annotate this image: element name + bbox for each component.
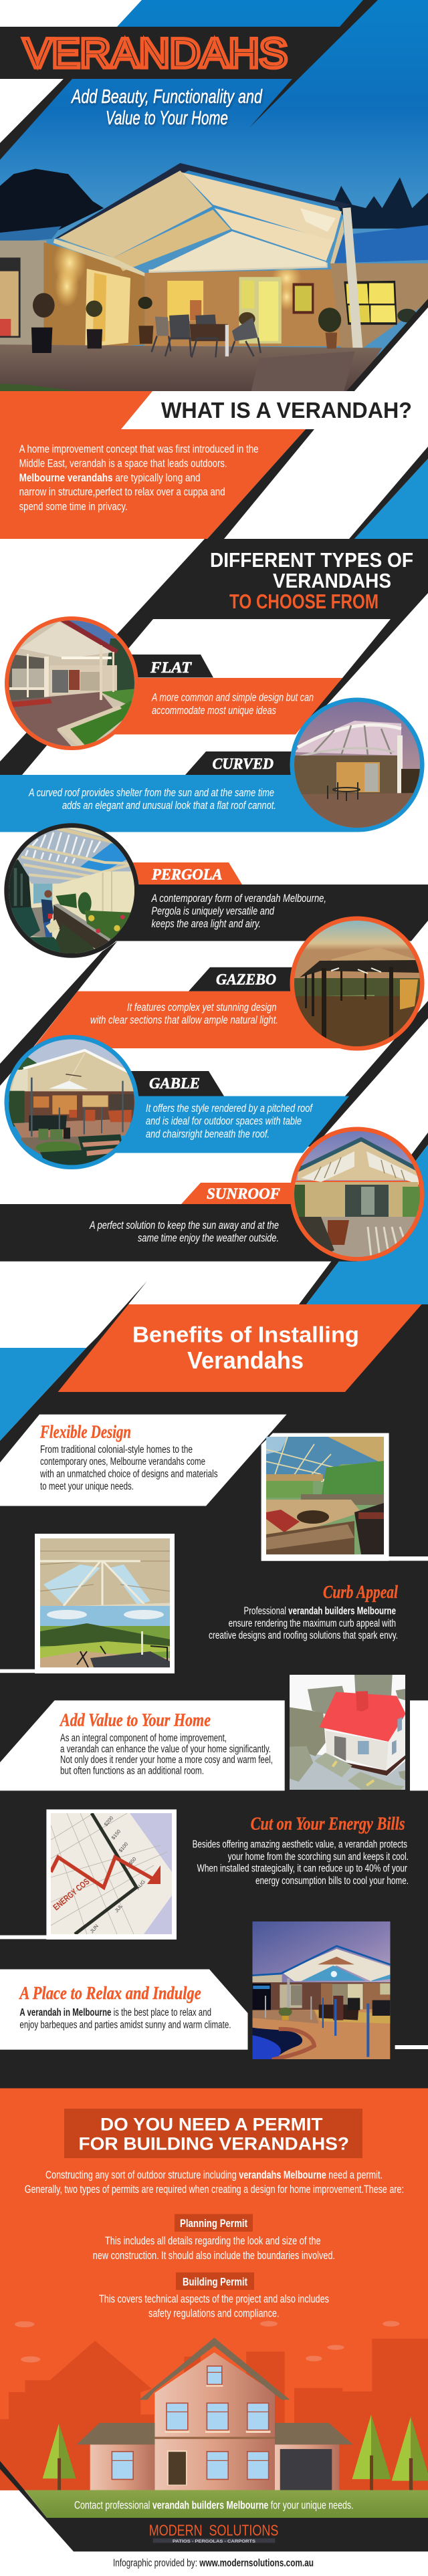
flat description band <box>100 678 342 734</box>
flat photo circle <box>0 616 144 750</box>
white connector line <box>0 1936 48 1939</box>
flat label: FLAT <box>150 659 192 676</box>
heading: different types: DIFFERENT TYPES OF <box>210 548 413 572</box>
photo: glass roof patio <box>266 1437 385 1554</box>
curved description band <box>0 775 354 832</box>
gazebo label tab <box>189 967 294 991</box>
intro text: Constructing any sort of outdoor structure including verandahs Melbourne need a permit. <box>45 2168 383 2181</box>
footer <box>0 2461 428 2569</box>
blue lower right panel stripe <box>299 1133 428 1304</box>
body <box>39 1444 218 1492</box>
body: but often functions as an additional room. <box>60 1766 204 1777</box>
type: pergola <box>4 823 428 958</box>
intro text <box>25 2168 404 2196</box>
heading: A Place to Relax and Indulge <box>19 1983 201 2003</box>
hero right corner stripe <box>346 299 428 391</box>
photo: roof with skylights and view <box>40 1538 170 1667</box>
chart photo: energy cost: $50 <box>128 1856 138 1866</box>
subtitle <box>71 86 263 129</box>
left white corner <box>0 79 64 143</box>
heading: Flexible Design <box>39 1421 131 1441</box>
chart photo: energy cost <box>51 1813 172 1934</box>
text panel <box>0 1970 247 2050</box>
gable label tab <box>130 1071 224 1096</box>
white connector line <box>0 1669 36 1673</box>
flat description: A more common and simple design but can <box>151 691 314 704</box>
planning permit text <box>93 2234 335 2262</box>
gazebo label: GAZEBO <box>216 971 276 988</box>
sunroof description: same time enjoy the weather outside. <box>138 1232 279 1244</box>
white connector line <box>389 1556 428 1560</box>
type: gable <box>4 1035 349 1169</box>
photo frame <box>261 1433 389 1561</box>
sunroof photo circle <box>290 1127 424 1264</box>
heading banner <box>58 1304 421 1392</box>
white background on the right <box>121 308 428 539</box>
gable description: and chairsright beneath the roof. <box>146 1127 270 1141</box>
body <box>60 1733 273 1777</box>
building permit label: Building Permit <box>183 2276 247 2289</box>
title band <box>0 0 378 128</box>
logo: MODERN SOLUTIONS <box>149 2522 278 2539</box>
photo: verandah at night <box>252 1921 391 2060</box>
subtitle: Add Beauty, Functionality and <box>71 86 263 108</box>
gable label: GABLE <box>149 1075 200 1092</box>
chart photo: energy cost: $100 <box>118 1841 129 1853</box>
gazebo description band <box>33 991 357 1048</box>
sunroof label tab <box>181 1183 294 1204</box>
heading text: DO YOU NEED A PERMIT <box>100 2115 323 2135</box>
paragraph: spend some time in privacy. <box>19 500 128 513</box>
sunroof label: SUNROOF <box>207 1185 280 1202</box>
section: types of verandahs backdrop band <box>0 539 428 775</box>
body: A verandah in Melbourne is the best place to relax and <box>19 2007 211 2018</box>
flat description <box>151 691 314 717</box>
flat label tab <box>130 655 213 678</box>
gazebo description <box>90 1001 278 1026</box>
subtitle: Value to Your Home <box>106 108 228 129</box>
sunroof description: A perfect solution to keep the sun away and at the <box>89 1219 279 1232</box>
curved description: adds an elegant and unusual look that a flat roof cannot. <box>62 799 276 812</box>
orange panel stripe <box>207 429 314 539</box>
building permit text <box>99 2293 329 2320</box>
title: VERANDAHS <box>23 31 288 76</box>
body: Professional verandah builders Melbourne <box>243 1605 396 1617</box>
pergola description: keeps the area light and airy. <box>151 917 261 930</box>
section: what is a verandah <box>0 308 428 539</box>
white connector line <box>395 2045 428 2049</box>
heading: WHAT IS A VERANDAH? <box>161 398 412 423</box>
logo: PATIOS - PERGOLAS - CARPORTS <box>173 2539 256 2544</box>
body: contemporary ones, Melbourne verandahs come <box>40 1456 205 1468</box>
orange background <box>0 2089 428 2490</box>
benefits: dark backdrop <box>0 1281 428 2089</box>
pergola label: PERGOLA <box>151 866 223 883</box>
heading text <box>79 2115 349 2153</box>
heading text <box>132 1322 359 1374</box>
benefit: flexible design <box>0 1415 428 1561</box>
chart photo: energy cost: $200 <box>103 1815 114 1827</box>
body: with an unmatched choice of designs and materials <box>39 1469 218 1480</box>
benefits heading <box>58 1304 421 1392</box>
chart photo: energy cost: AUG <box>135 1879 146 1891</box>
blue lower left panel <box>0 1348 86 1441</box>
logo <box>149 2522 278 2544</box>
gable description <box>146 1102 314 1141</box>
illustration: house and trees <box>43 2338 428 2492</box>
pergola description band <box>72 885 428 941</box>
heading: different types: TO CHOOSE FROM <box>229 590 379 613</box>
curved label: CURVED <box>213 755 274 772</box>
gable description band <box>72 1096 349 1153</box>
flat description: accommodate most unique ideas <box>152 704 276 717</box>
hero photo: verandah at dusk <box>0 0 428 391</box>
heading box <box>64 2109 362 2158</box>
benefit: curb appeal <box>0 1534 398 1673</box>
building permit label <box>176 2272 254 2290</box>
benefit: relax and indulge <box>0 1921 428 2060</box>
paragraph: Middle East, verandah is a space that leads outdoors. <box>19 457 227 469</box>
curved photo circle <box>290 698 424 832</box>
body <box>193 1839 409 1887</box>
curved description <box>28 786 276 812</box>
body: Not only does it render your home a more cosy and warm feel, <box>60 1754 273 1766</box>
paragraph: narrow in structure,perfect to relax over a cuppa and <box>19 485 225 498</box>
left diagonal stripe <box>0 941 118 1086</box>
type: flat <box>0 616 342 750</box>
heading: Curb Appeal <box>323 1582 398 1602</box>
paragraph <box>19 443 259 513</box>
gable description: It offers the style rendered by a pitched roof <box>146 1102 314 1115</box>
blue lower right panel <box>306 1145 428 1304</box>
green lawn band <box>25 2490 428 2518</box>
heading text: Verandahs <box>187 1346 304 1374</box>
left dark accent stripe <box>0 79 72 160</box>
photo: house and money <box>289 1673 406 1790</box>
planning permit label <box>175 2214 253 2232</box>
heading text: FOR BUILDING VERANDAHS? <box>79 2133 349 2153</box>
gazebo photo circle <box>290 916 424 1056</box>
type: gazebo <box>33 916 424 1056</box>
gazebo description: It features complex yet stunning design <box>127 1001 277 1014</box>
pergola photo circle <box>4 823 139 958</box>
blue corner stripe <box>349 447 428 539</box>
pergola description: Pergola is uniquely versatile and <box>151 905 274 917</box>
paragraph: Melbourne verandahs are typically long and <box>19 471 201 484</box>
benefit: add value <box>0 1673 428 1790</box>
benefit: energy bills <box>0 1809 409 1940</box>
body <box>19 2007 231 2031</box>
pergola description: A contemporary form of verandah Melbourne, <box>151 892 326 905</box>
pergola description <box>151 892 326 930</box>
heading: Add Value to Your Home <box>59 1710 211 1730</box>
chart photo: energy cost: $150 <box>110 1829 122 1841</box>
body: As an integral component of home improvement, <box>60 1733 227 1744</box>
heading: different types: VERANDAHS <box>273 569 391 592</box>
body <box>209 1605 398 1641</box>
building permit text: This covers technical aspects of the project and also includes <box>99 2293 329 2305</box>
body: From traditional colonial-style homes to the <box>40 1444 193 1455</box>
body: enjoy barbeques and parties amidst sunny and warm climate. <box>19 2019 231 2031</box>
contact line: Contact professional verandah builders Melbourne for your unique needs. <box>74 2499 354 2512</box>
cityscape <box>0 2321 428 2491</box>
text panel <box>0 1700 285 1790</box>
type: sunroof <box>0 1127 424 1264</box>
gable photo circle <box>4 1035 139 1169</box>
photo frame <box>35 1534 175 1673</box>
gazebo description: with clear sections that allow ample natural light. <box>90 1014 278 1026</box>
curved label tab <box>185 751 294 775</box>
white side block <box>410 1700 428 1790</box>
orange panel <box>0 391 306 539</box>
chart photo: energy cost: JUL <box>114 1903 124 1913</box>
sunroof description <box>89 1219 279 1244</box>
title: VERANDAHS <box>23 31 288 76</box>
right diagonal stripe <box>301 1001 428 1147</box>
body: a verandah can enhance the value of your home significantly. <box>60 1744 271 1755</box>
pergola label tab <box>130 862 242 885</box>
building permit text: safety regulations and compliance. <box>148 2307 280 2320</box>
top white corner <box>0 0 142 27</box>
dark base <box>0 2461 428 2551</box>
heading text: Benefits of Installing <box>132 1322 359 1346</box>
chart photo: energy cost: ENERGY COST <box>51 1873 94 1912</box>
curved description: A curved roof provides shelter from the sun and at the same time <box>28 786 274 799</box>
sunroof description band <box>0 1204 357 1262</box>
section: permit <box>0 2089 428 2492</box>
planning permit text: new construction. It should also include the boundaries involved. <box>93 2249 335 2262</box>
heading: different types <box>210 548 413 613</box>
paragraph: A home improvement concept that was first introduced in the <box>19 443 259 455</box>
body: to meet your unique needs. <box>40 1481 134 1492</box>
gable description: and is ideal for outdoor spaces with table <box>146 1115 302 1127</box>
type: curved <box>0 698 424 832</box>
photo frame <box>46 1809 177 1940</box>
planning permit text: This includes all details regarding the look and size of the <box>105 2234 321 2247</box>
text panel <box>0 1415 287 1506</box>
planning permit label: Planning Permit <box>180 2217 247 2230</box>
blue corner <box>354 459 428 539</box>
credit line: Infographic provided by: www.modernsolutions.com.au <box>113 2557 314 2569</box>
chart photo: energy cost: JUN <box>89 1923 100 1934</box>
